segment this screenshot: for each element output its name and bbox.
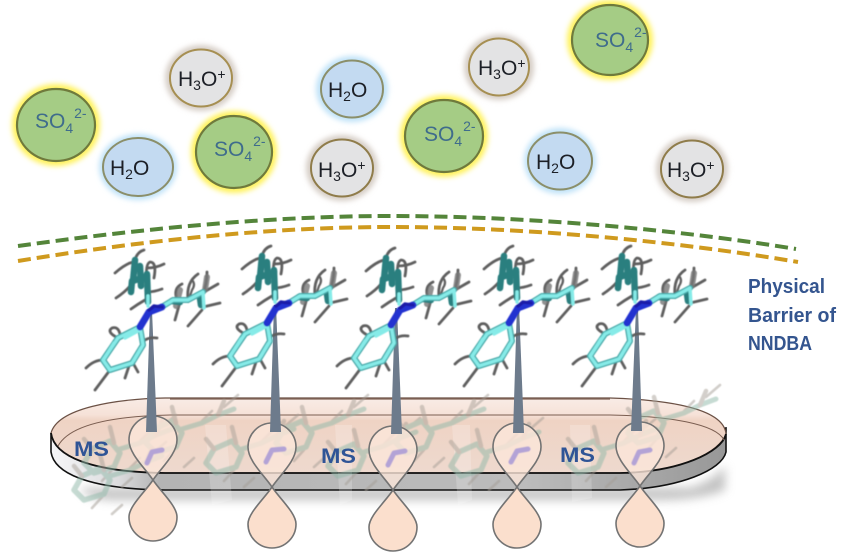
nitrogen centres showing through knots <box>147 449 650 465</box>
ion: sulfate 2: 2- <box>253 133 266 149</box>
ion: water 3: O <box>559 151 575 174</box>
petri dish membrane support <box>51 398 726 500</box>
ion: sulfate 4 <box>567 0 653 80</box>
label: physical barrier: NNDBA <box>748 333 812 355</box>
ion: water 2: H <box>328 79 343 102</box>
ion: hydronium 2: H <box>318 159 333 182</box>
ion: water 3: H <box>536 151 551 174</box>
ion: sulfate 3: 4 <box>454 133 462 149</box>
ion: sulfate 3: SO <box>424 123 454 146</box>
ion: water 2: 2 <box>343 88 351 104</box>
ion: water 3 <box>524 128 596 194</box>
dish shadow <box>80 465 725 500</box>
ion: hydronium 4: 3 <box>682 168 690 184</box>
ion: water 3: 2 <box>551 160 559 176</box>
molecule 4 <box>455 246 589 386</box>
label: physical barrier <box>748 276 836 355</box>
ion: hydronium 2 <box>306 135 378 201</box>
ion: hydronium 3: 3 <box>493 66 501 82</box>
dish top surface <box>51 398 726 473</box>
membrane label: MS 1: MS <box>74 438 109 461</box>
ion: hydronium 4 <box>656 136 728 202</box>
ion: hydronium 1 <box>165 45 237 111</box>
membrane label: MS 2: MS <box>321 445 356 468</box>
molecule 5 <box>573 246 707 386</box>
ion: hydronium 4: O <box>690 159 706 182</box>
ion: water 1: H <box>110 157 125 180</box>
ions group <box>12 0 728 202</box>
ion: sulfate 3: 2- <box>463 118 476 134</box>
ion: hydronium 1: O <box>201 68 217 91</box>
ion: water 2: O <box>351 79 367 102</box>
ion: sulfate 2: 4 <box>244 148 252 164</box>
membrane label: MS 3: MS <box>560 444 595 467</box>
ion: hydronium 3: O <box>501 57 517 80</box>
ion: sulfate 1: 4 <box>65 120 73 136</box>
ion: hydronium 1: H <box>178 68 193 91</box>
tethers <box>146 305 642 434</box>
ion: hydronium 2: O <box>341 159 357 182</box>
ion: hydronium 1: 3 <box>193 77 201 93</box>
ion: hydronium 3 <box>464 34 534 100</box>
dish wall <box>51 428 726 490</box>
ion: water 1 <box>99 134 177 200</box>
anchor knots <box>129 416 664 551</box>
ion: hydronium 3: + <box>517 55 526 71</box>
NNDBA molecules <box>86 246 707 390</box>
ion: water 1: O <box>133 157 149 180</box>
ion: hydronium 4: H <box>667 159 682 182</box>
ion: water 2 <box>316 56 388 122</box>
faint white patches behind the anchors <box>205 425 592 505</box>
ion: sulfate 1: 2- <box>74 105 87 121</box>
label: physical barrier: Physical <box>748 276 825 298</box>
ion: hydronium 1: + <box>217 66 226 82</box>
molecule 3 <box>337 248 471 388</box>
ion: sulfate 2 <box>191 111 277 193</box>
embedded ghost molecules <box>74 385 720 514</box>
ion: sulfate 4: 2- <box>634 24 647 40</box>
ion: hydronium 4: + <box>706 157 714 173</box>
ion: sulfate 4: SO <box>595 29 625 52</box>
barrier dashed lines <box>18 216 798 262</box>
ion: hydronium 2: + <box>357 157 366 173</box>
ion: water 1: 2 <box>125 166 133 182</box>
label: physical barrier: Barrier of <box>748 305 836 327</box>
ion: hydronium 2: 3 <box>333 168 341 184</box>
ion: sulfate 4: 4 <box>625 39 633 55</box>
ion: hydronium 3: H <box>478 57 493 80</box>
ion: sulfate 2: SO <box>214 138 244 161</box>
ion: sulfate 3 <box>400 95 488 177</box>
ion: sulfate 1: SO <box>35 110 65 133</box>
molecule 1 <box>86 250 220 390</box>
molecule 2 <box>213 246 347 386</box>
ion: sulfate 1 <box>12 84 100 166</box>
